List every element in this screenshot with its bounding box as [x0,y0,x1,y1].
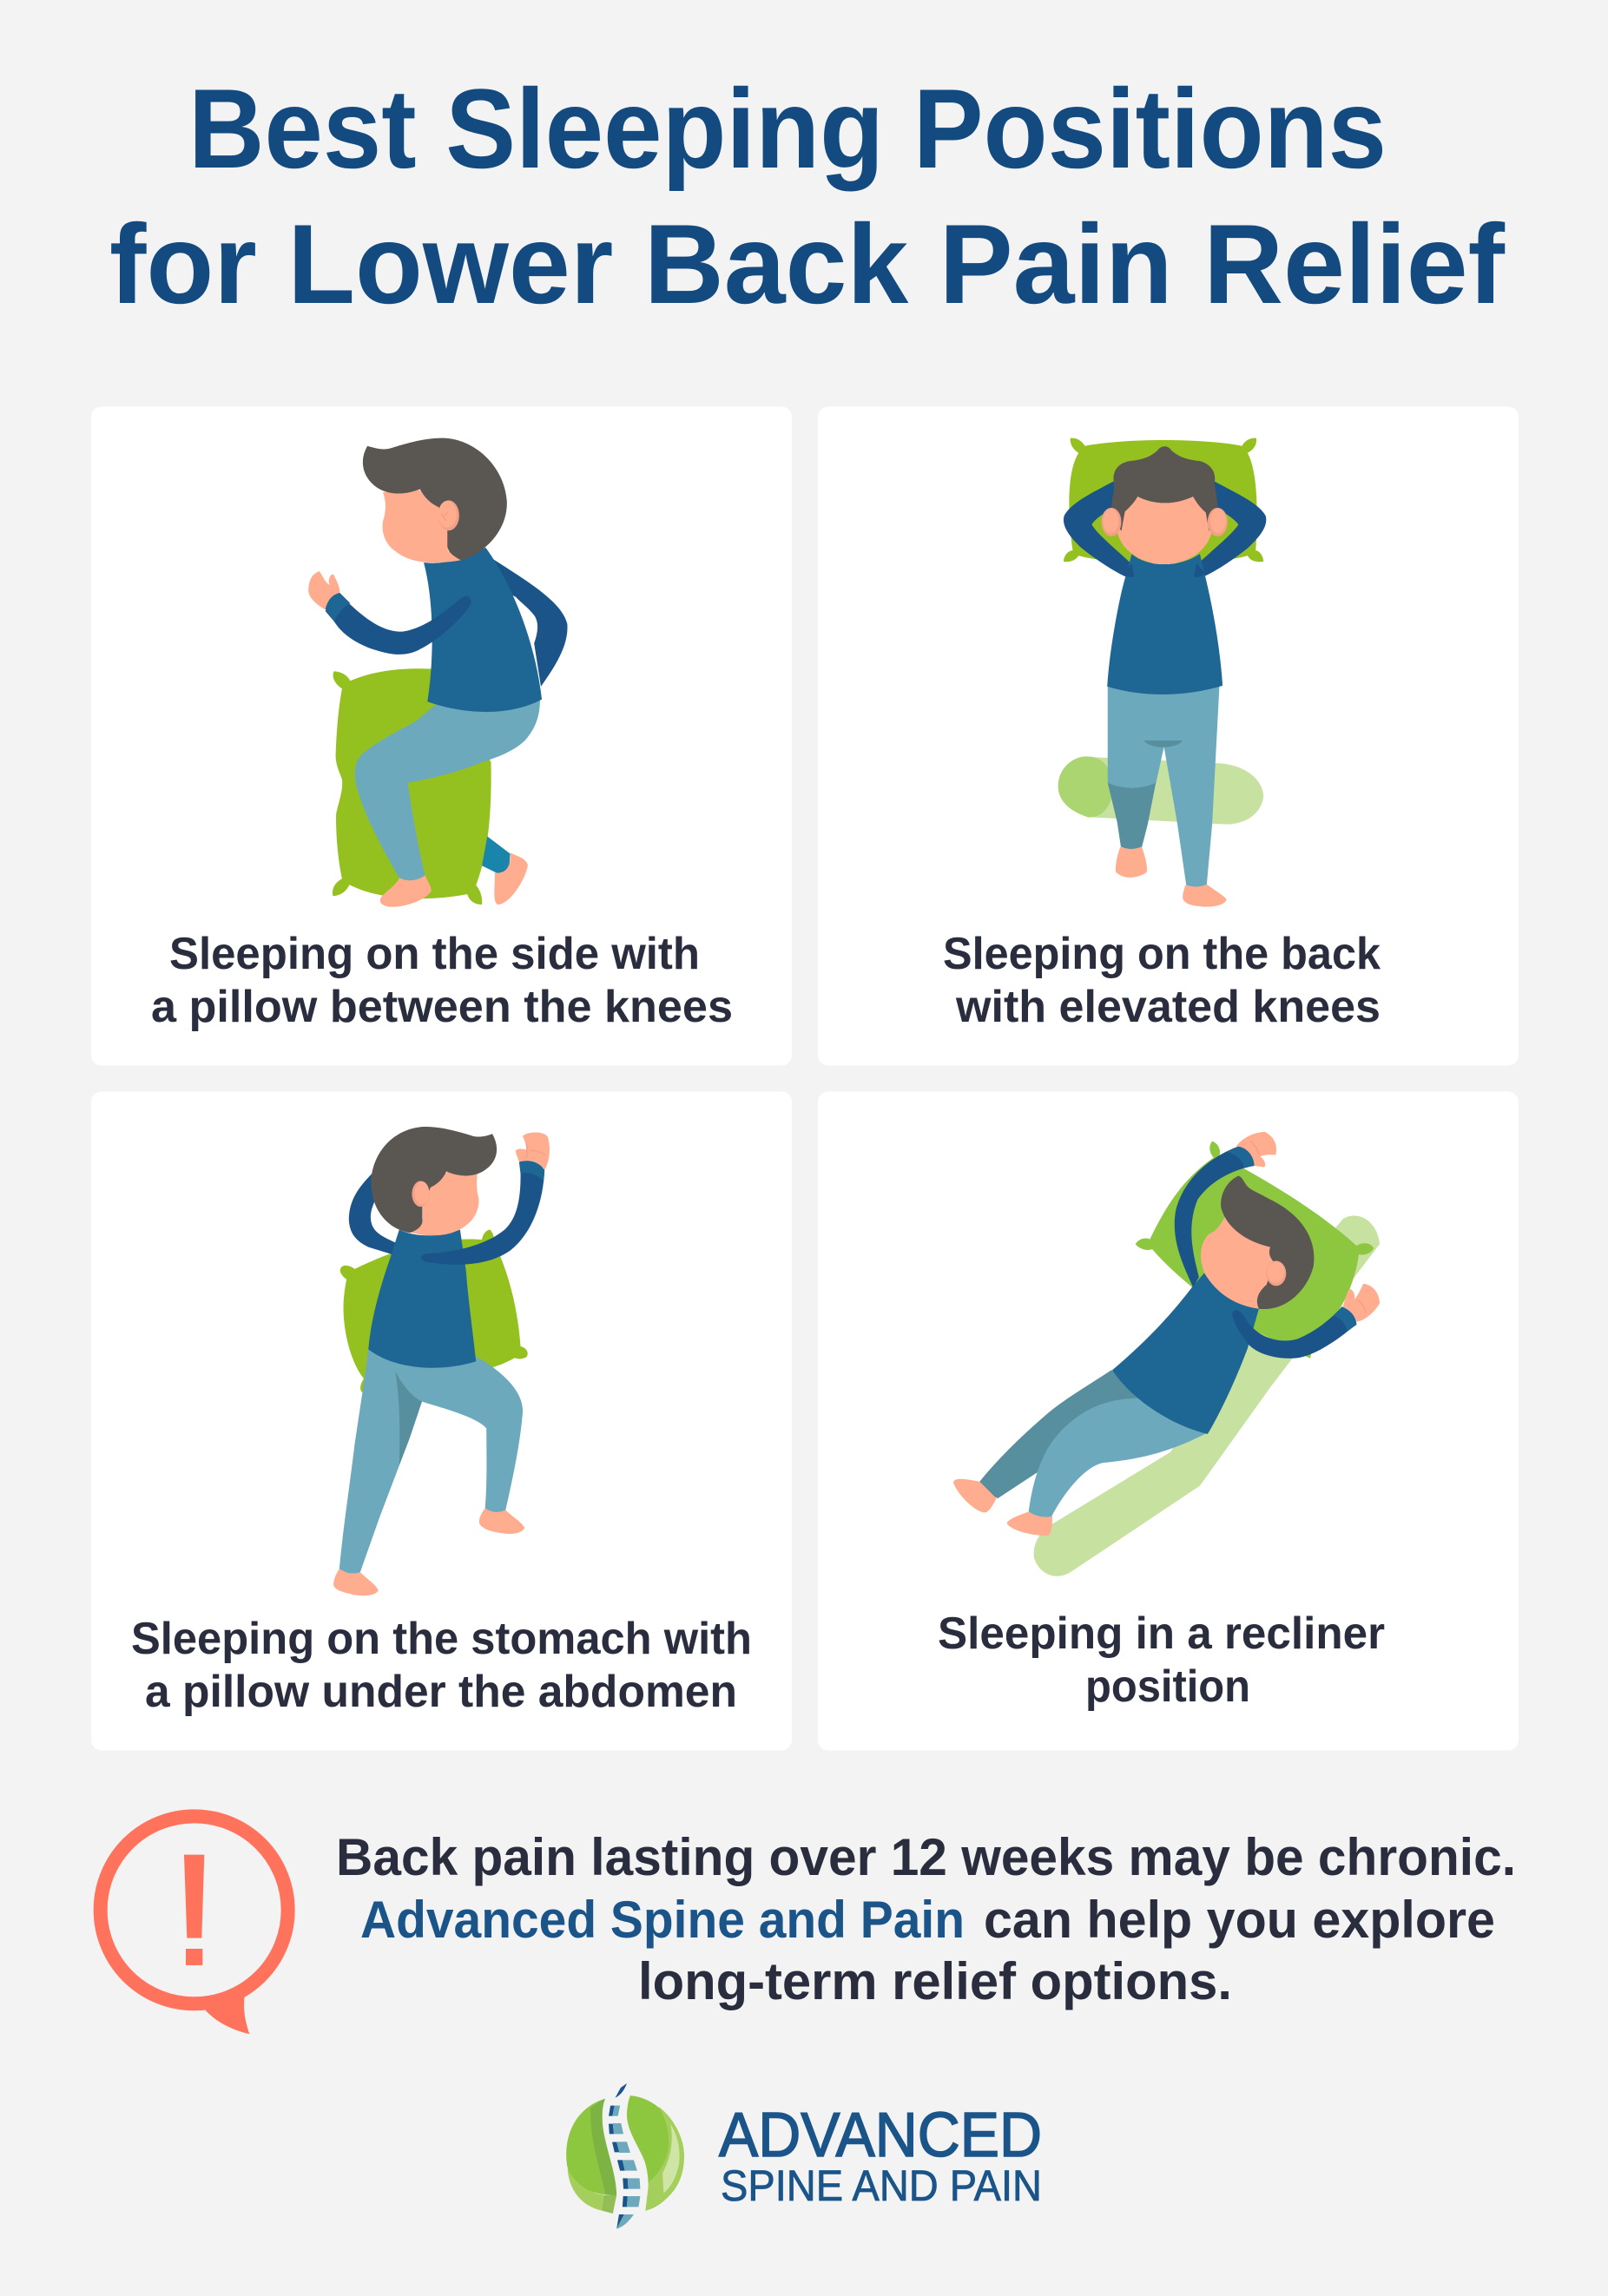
panel: recliner sleeping [818,1092,1519,1750]
callout text: Advanced Spine and Pain [360,1891,965,1949]
caption: recliner sleeping: Sleeping in a recliner [938,1609,1385,1659]
title: Best Sleeping Positions [188,65,1387,192]
caption: stomach sleeping: a pillow under the abdomen [145,1667,737,1717]
logo mark: spine in green circle [566,2083,684,2229]
panel: back sleeping [818,406,1519,1066]
icon: exclamation speech bubble [101,1816,288,2034]
caption: stomach sleeping [131,1614,752,1717]
callout text: long-term relief options. [638,1952,1232,2010]
callout text: can help you explore [984,1891,1495,1949]
title [109,65,1506,327]
illustration: recliner position sleeper [953,1132,1380,1576]
caption: recliner sleeping: position [1085,1661,1250,1712]
illustration: stomach sleeper with pillow under abdomen [333,1127,550,1595]
callout text: Back pain lasting over 12 weeks may be chronic. [336,1828,1516,1886]
caption: stomach sleeping: Sleeping on the stomach with [131,1614,752,1664]
caption: back sleeping: with elevated knees [955,982,1381,1032]
caption: back sleeping [943,929,1381,1032]
logo wordmark: ADVANCED [719,2101,1042,2170]
panel: stomach sleeping [91,1092,792,1750]
panel: side sleeping [91,406,792,1066]
title: for Lower Back Pain Relief [109,201,1506,327]
caption: back sleeping: Sleeping on the back [943,929,1381,979]
callout text [336,1828,1516,2010]
caption: side sleeping: Sleeping on the side with [169,929,700,979]
logo [566,2083,1042,2229]
caption: side sleeping [151,929,733,1032]
illustration: back sleeper with elevated knees [1058,438,1266,907]
logo wordmark [719,2101,1042,2210]
illustration: side sleeper with pillow between knees [308,438,568,907]
caption: side sleeping: a pillow between the knees [151,982,733,1032]
logo wordmark: SPINE AND PAIN [721,2161,1042,2210]
caption: recliner sleeping [938,1609,1385,1712]
